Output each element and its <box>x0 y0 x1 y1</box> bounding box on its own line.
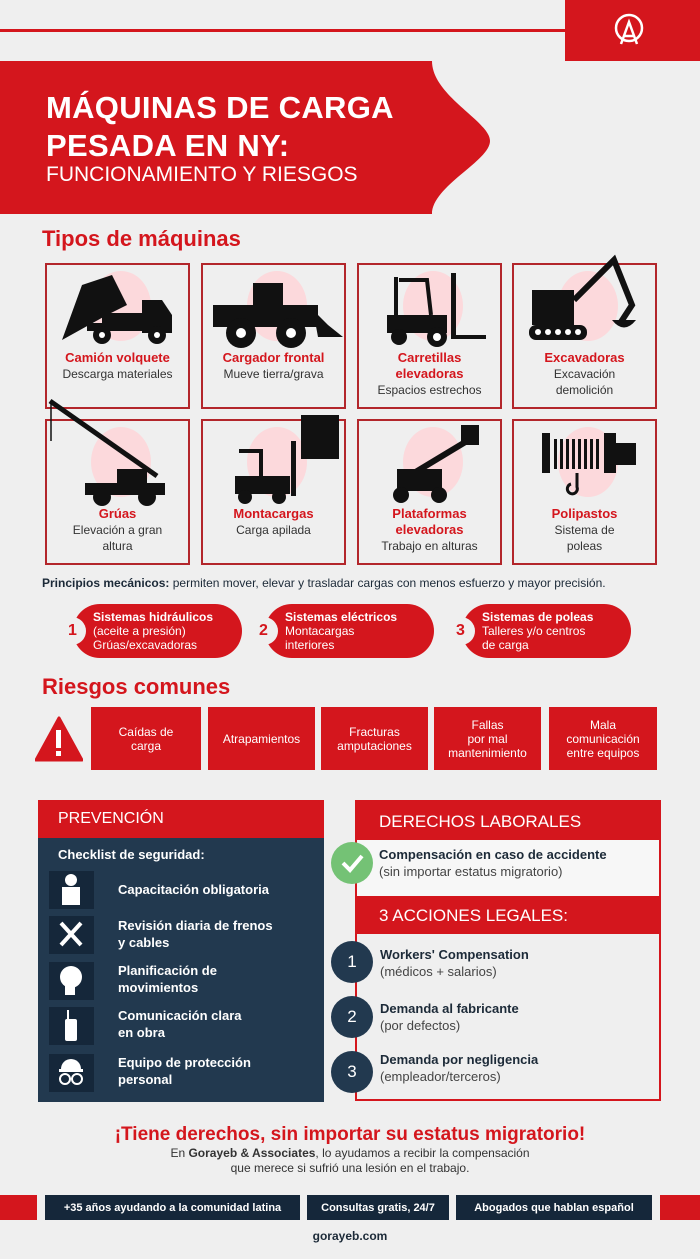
legal actions: 3 <box>347 1062 357 1081</box>
card: carretillas: Carretillas <box>398 350 461 365</box>
closing text: En Gorayeb & Associates, lo ayudamos a recibir la compensación <box>170 1146 530 1160</box>
pill 1 <box>68 604 242 658</box>
panel: derechos: 3 ACCIONES LEGALES: <box>379 906 568 925</box>
top line <box>0 29 565 32</box>
card: cargador <box>201 263 346 409</box>
pill 3: Talleres y/o centros <box>482 624 585 638</box>
card: excavadoras <box>512 263 657 409</box>
title: MÁQUINAS DE CARGA <box>46 90 394 125</box>
card: polipastos: poleas <box>567 539 602 553</box>
card: excavadoras: demolición <box>556 383 613 397</box>
hero banner <box>0 61 490 214</box>
machine cards <box>45 254 657 565</box>
card: polipastos: Polipastos <box>552 506 617 521</box>
risk boxes: Fracturas <box>349 724 400 738</box>
card: carretillas: Espacios estrechos <box>377 383 482 397</box>
risk boxes: amputaciones <box>337 738 412 752</box>
check item <box>331 842 607 884</box>
footer bars <box>0 1195 700 1220</box>
legal actions: 1 <box>347 952 357 971</box>
pill 2 <box>259 604 434 658</box>
checklist items <box>49 871 273 1092</box>
title <box>46 90 394 163</box>
card: polipastos <box>512 419 657 565</box>
risk boxes: comunicación <box>566 732 640 746</box>
card: polipastos: Sistema de <box>554 523 615 537</box>
risk boxes: Caídas de <box>119 724 173 738</box>
heading: riesgos: Riesgos comunes <box>42 674 230 699</box>
pill 3: Sistemas de poleas <box>482 610 593 624</box>
legal actions <box>331 941 538 1093</box>
card: montacargas: Montacargas <box>233 506 314 521</box>
card: gruas: altura <box>102 539 133 553</box>
panel: derechos: DERECHOS LABORALES <box>379 812 581 831</box>
checklist items: Comunicación clara <box>118 1008 242 1023</box>
risk boxes <box>91 707 657 770</box>
card: cargador: Cargador frontal <box>223 350 324 365</box>
principles text: Principios mecánicos: permiten mover, elevar y trasladar cargas con menos esfuerzo y mayor precisión. <box>42 576 606 590</box>
card: plataformas: elevadoras <box>396 522 463 537</box>
legal actions: Demanda al fabricante <box>380 1001 519 1016</box>
card: cargador: Mueve tierra/grava <box>223 367 324 381</box>
card: carretillas <box>357 263 502 409</box>
card: camion: Camión volquete <box>65 350 170 365</box>
card: montacargas: Carga apilada <box>236 523 311 537</box>
checklist items: y cables <box>118 935 169 950</box>
website: gorayeb.com <box>313 1229 387 1243</box>
pill 2: Sistemas eléctricos <box>285 610 397 624</box>
card: gruas <box>45 419 190 565</box>
legal actions: (por defectos) <box>380 1018 460 1033</box>
subtitle: FUNCIONAMIENTO Y RIESGOS <box>46 163 358 186</box>
risk boxes: Mala <box>590 718 616 732</box>
pill 3 <box>456 604 631 658</box>
pill 1: (aceite a presión) <box>93 624 186 638</box>
legal actions: 2 <box>347 1007 357 1026</box>
pill 2: Montacargas <box>285 624 354 638</box>
checklist items: Equipo de protección <box>118 1055 251 1070</box>
legal actions: (médicos + salarios) <box>380 964 497 979</box>
checklist items: Capacitación obligatoria <box>118 882 269 897</box>
footer bars: Abogados que hablan español <box>474 1202 634 1214</box>
title: PESADA EN NY: <box>46 128 289 163</box>
risk boxes: por mal <box>467 732 508 746</box>
pill 1: 1 <box>68 622 77 639</box>
icon: warning <box>35 716 83 762</box>
panel: prevencion: PREVENCIÓN <box>58 810 164 827</box>
legal actions: Workers' Compensation <box>380 947 529 962</box>
legal actions: Demanda por negligencia <box>380 1052 538 1067</box>
card: excavadoras: Excavación <box>554 367 615 381</box>
card: excavadoras: Excavadoras <box>544 350 625 365</box>
card: montacargas <box>201 419 346 565</box>
pill 3: 3 <box>456 622 465 639</box>
legal actions: (empleador/terceros) <box>380 1069 501 1084</box>
card: plataformas <box>357 419 502 565</box>
checklist items: en obra <box>118 1025 165 1040</box>
card: camion <box>45 263 190 409</box>
card: plataformas: Plataformas <box>392 506 467 521</box>
checklist items: movimientos <box>118 980 198 995</box>
checklist items: Revisión diaria de frenos <box>118 918 273 933</box>
closing text <box>170 1146 530 1175</box>
checklist items: Planificación de <box>118 963 217 978</box>
heading: tipos: Tipos de máquinas <box>42 226 241 251</box>
card: gruas: Grúas <box>99 506 136 521</box>
card: plataformas: Trabajo en alturas <box>381 539 478 553</box>
panel: prevencion <box>38 800 324 1102</box>
closing heading: ¡Tiene derechos, sin importar su estatus migratorio! <box>115 1124 585 1145</box>
panel: derechos <box>355 800 661 1101</box>
footer bars: +35 años ayudando a la comunidad latina <box>64 1202 281 1214</box>
pill 2: 2 <box>259 622 268 639</box>
risk boxes: mantenimiento <box>448 746 527 760</box>
card: gruas: Elevación a gran <box>73 523 162 537</box>
pill 3: de carga <box>482 638 529 652</box>
risk boxes: Fallas <box>471 718 504 732</box>
pill 2: interiores <box>285 638 334 652</box>
card: carretillas: elevadoras <box>396 366 463 381</box>
pill 1: Grúas/excavadoras <box>93 638 197 652</box>
closing text: que merece si sufrió una lesión en el trabajo. <box>231 1161 469 1175</box>
card: camion: Descarga materiales <box>62 367 173 381</box>
risk boxes: Atrapamientos <box>223 732 300 746</box>
logo box <box>565 0 700 61</box>
risk boxes: entre equipos <box>567 746 639 760</box>
checklist items: personal <box>118 1072 172 1087</box>
pill 1: Sistemas hidráulicos <box>93 610 213 624</box>
check item: (sin importar estatus migratorio) <box>379 864 562 879</box>
check item: Compensación en caso de accidente <box>379 847 607 862</box>
panel: prevencion: Checklist de seguridad: <box>58 847 205 862</box>
risk boxes: carga <box>131 738 161 752</box>
footer bars: Consultas gratis, 24/7 <box>321 1202 435 1214</box>
